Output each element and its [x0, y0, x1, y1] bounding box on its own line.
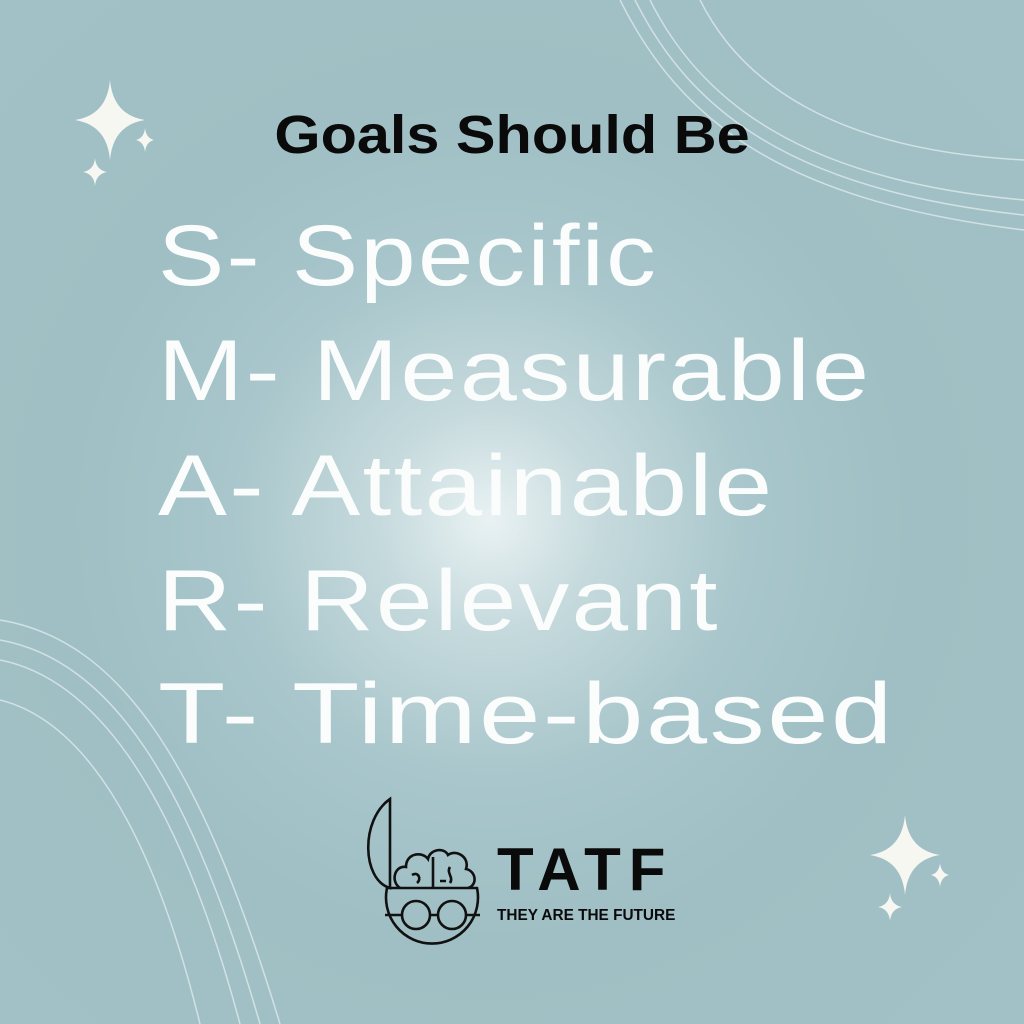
logo: [366, 796, 675, 945]
icon: sparkles bottom right: [870, 816, 949, 920]
M line: M- Measurable: [158, 323, 871, 419]
brand name: TATF: [497, 836, 673, 903]
icon: sparkles top left: [75, 80, 154, 186]
T line: T- Time-based: [158, 666, 895, 762]
A line: A- Attainable: [158, 438, 774, 534]
S line: S- Specific: [158, 208, 658, 304]
SMART list: [158, 208, 895, 762]
tagline: THEY ARE THE FUTURE: [497, 907, 675, 924]
title: Goals Should Be: [274, 105, 750, 165]
icon: brain head: [366, 796, 480, 945]
R line: R- Relevant: [158, 553, 720, 649]
